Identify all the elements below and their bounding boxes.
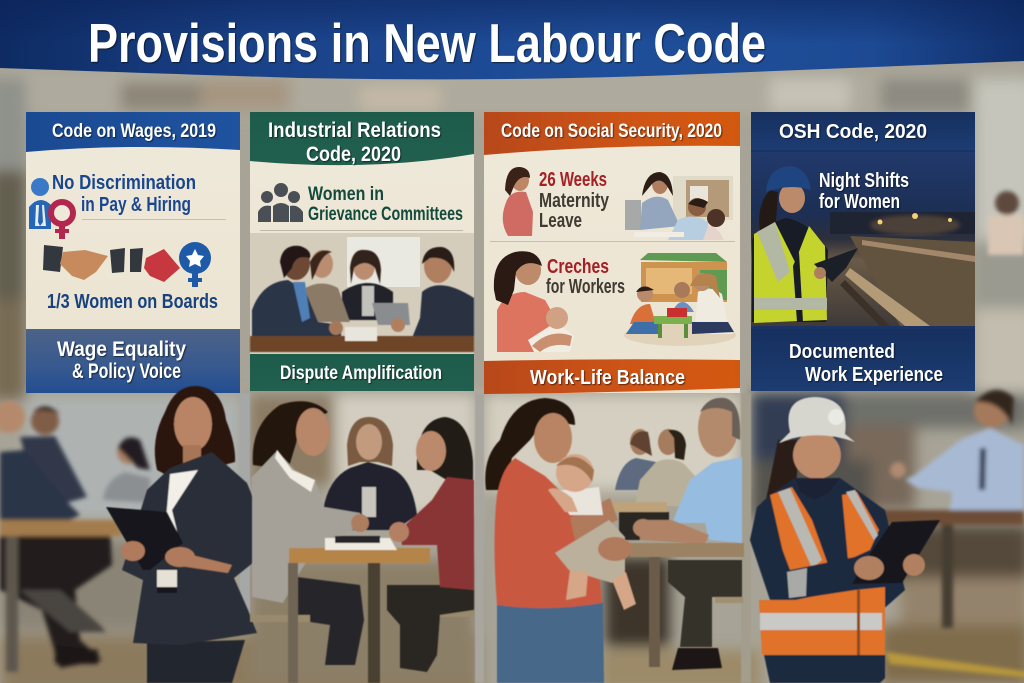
heading: wages: Code on Wages, 2019 xyxy=(52,121,216,142)
person: mother holding baby xyxy=(485,398,636,683)
footer: wage equality: & Policy Voice xyxy=(72,360,181,383)
text: no discrimination: in Pay & Hiring xyxy=(81,194,191,216)
text: women in grievance committees: Grievance Committees xyxy=(308,204,463,225)
text: maternity leave: Leave xyxy=(539,210,582,232)
text: night shifts: for Women xyxy=(819,191,900,213)
heading: wages xyxy=(26,112,240,152)
footer: work-life balance: Work-Life Balance xyxy=(530,367,685,389)
panel: Industrial Relations Code xyxy=(250,112,474,391)
footer: documented work experience xyxy=(751,329,975,391)
person group: women at meeting table xyxy=(250,401,474,683)
text: women on boards: 1/3 Women on Boards xyxy=(47,291,218,313)
background person right xyxy=(869,191,1024,628)
photo: meeting xyxy=(250,233,474,355)
footer: wage equality: Wage Equality xyxy=(57,338,186,361)
title: Provisions in New Labour Code xyxy=(88,12,766,74)
person: businesswoman with clipboard xyxy=(106,386,269,683)
text: no discrimination: No Discrimination xyxy=(52,172,196,194)
person: safety worker with helmet and vest xyxy=(750,397,940,683)
heading: industrial relations: Industrial Relations xyxy=(268,119,441,142)
panel: OSH Code xyxy=(751,112,975,391)
illustration: night-shift worker xyxy=(752,166,858,323)
heading: OSH: OSH Code, 2020 xyxy=(779,121,927,143)
heading: social security: Code on Social Security, 2020 xyxy=(501,121,722,142)
heading: social security xyxy=(484,112,740,155)
text: maternity leave: 26 Weeks xyxy=(539,169,607,191)
icon: group of people xyxy=(258,183,303,222)
illustration: mother and baby xyxy=(494,251,574,352)
footer: work-life balance xyxy=(484,359,740,394)
panel: Code on Wages xyxy=(26,112,240,393)
icon: handshakes and star xyxy=(43,242,211,287)
heading: OSH xyxy=(751,112,975,150)
icon: gender equality xyxy=(29,178,73,239)
banner xyxy=(0,0,1024,79)
heading: industrial relations: Code, 2020 xyxy=(306,143,401,166)
text: maternity leave: Maternity xyxy=(539,190,610,212)
photo: night rail yard xyxy=(751,152,975,326)
footer: wage equality xyxy=(26,329,240,393)
footer: dispute amplification: Dispute Amplification xyxy=(280,363,442,384)
pillars between scenes xyxy=(240,393,751,683)
illustration: pregnant woman xyxy=(503,167,533,236)
text: creches for workers: Creches xyxy=(547,256,609,278)
person group: man and women at table xyxy=(612,398,744,670)
background people left xyxy=(0,401,150,672)
illustration: parent and children at desk xyxy=(625,172,733,240)
footer: documented work experience: Documented xyxy=(789,341,895,363)
panel: Code on Social Security xyxy=(484,112,740,394)
illustration: creche children playing xyxy=(624,253,736,346)
text: creches for workers: for Workers xyxy=(546,276,625,298)
text: women in grievance committees: Women in xyxy=(308,184,384,205)
footer: dispute amplification xyxy=(250,354,474,391)
text: night shifts: Night Shifts xyxy=(819,170,909,192)
footer: documented work experience: Work Experience xyxy=(805,364,943,386)
heading: industrial relations xyxy=(250,112,474,166)
